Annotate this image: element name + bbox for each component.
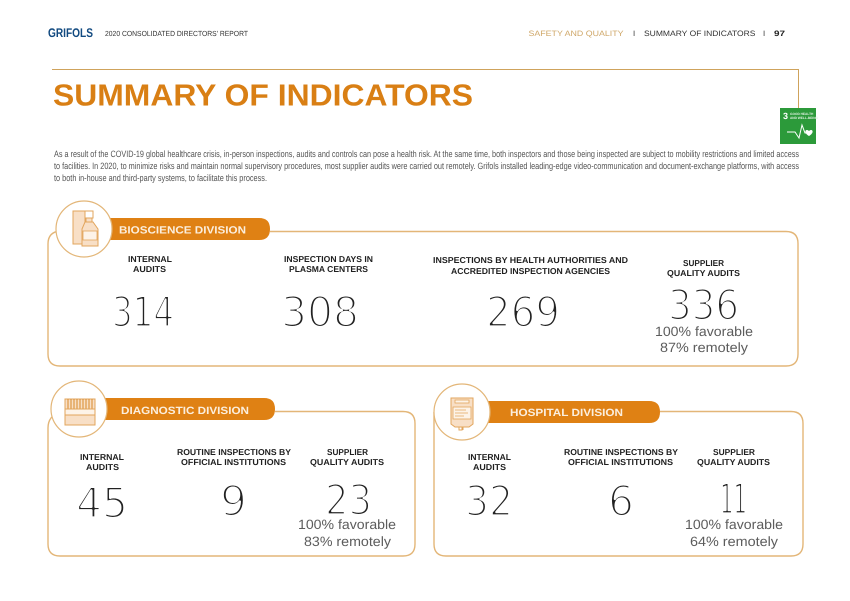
stat: supplier audits: 64% remotely xyxy=(690,534,778,549)
stat: internal audits: INTERNAL xyxy=(128,254,172,264)
header: section breadcrumb and page number: I xyxy=(763,29,765,38)
stat: routine inspections: ROUTINE INSPECTIONS BY xyxy=(177,447,291,457)
stat: inspection days: PLASMA CENTERS xyxy=(289,264,368,274)
stat: internal audits: INTERNAL xyxy=(80,452,124,462)
header: section breadcrumb and page number: SAFETY AND QUALITY xyxy=(528,29,624,38)
stat: supplier audits: 11 xyxy=(720,474,747,524)
icon: vial and box xyxy=(56,201,112,257)
stat: internal audits: AUDITS xyxy=(473,462,506,472)
stat: inspection days: 308 xyxy=(281,288,359,336)
stat: inspection days xyxy=(281,254,373,336)
logo: Grifols: GRIFOLS xyxy=(48,26,93,40)
stat: routine inspections xyxy=(564,447,678,526)
stat: internal audits: 32 xyxy=(465,476,513,526)
stat: supplier audits: SUPPLIER xyxy=(683,258,725,268)
header: section breadcrumb and page number: SUMMARY OF INDICATORS xyxy=(644,29,756,38)
stat: routine inspections: OFFICIAL INSTITUTIONS xyxy=(568,457,673,467)
header: section breadcrumb and page number: 97 xyxy=(774,29,785,38)
panel: bioscience division xyxy=(48,201,798,366)
icon: SDG 3 good health and well-being xyxy=(780,108,818,144)
header: section breadcrumb and page number: I xyxy=(633,29,635,38)
stat: internal audits: 45 xyxy=(76,478,128,528)
intro text: to both in-house and third-party systems, to facilitate this process. xyxy=(54,173,267,183)
header: report name: 2020 CONSOLIDATED DIRECTORS' REPORT xyxy=(105,29,248,38)
stat: routine inspections: 9 xyxy=(220,476,247,526)
stat: internal audits xyxy=(465,452,513,526)
division banner xyxy=(100,218,270,240)
panel outline xyxy=(48,231,798,366)
stat: routine inspections xyxy=(177,447,291,526)
division heading: BIOSCIENCE DIVISION xyxy=(119,224,246,236)
icon: IV bag xyxy=(434,384,490,440)
stat: health authority inspections: ACCREDITED INSPECTION AGENCIES xyxy=(451,266,610,276)
title: SUMMARY OF INDICATORS xyxy=(53,78,473,112)
stat: supplier audits: QUALITY AUDITS xyxy=(667,268,740,278)
stat: health authority inspections: 269 xyxy=(486,288,560,336)
stat: internal audits xyxy=(112,254,174,336)
stat: supplier audits: 100% favorable xyxy=(298,517,396,532)
stat: routine inspections: OFFICIAL INSTITUTIONS xyxy=(181,457,286,467)
stat: supplier audits: QUALITY AUDITS xyxy=(310,457,384,467)
panel: diagnostic division xyxy=(48,381,415,556)
icon: analyzer xyxy=(51,381,107,437)
division heading: DIAGNOSTIC DIVISION xyxy=(121,405,249,417)
panel outline xyxy=(434,412,803,556)
division banner xyxy=(480,401,660,423)
icon: SDG 3 good health and well-being: AND WELL-BEING xyxy=(790,116,818,120)
icon: SDG 3 good health and well-being: GOOD HEALTH xyxy=(790,112,814,116)
stat: supplier audits: 23 xyxy=(325,476,372,524)
stat: supplier audits: 83% remotely xyxy=(304,534,391,549)
stat: supplier audits: 100% favorable xyxy=(655,324,753,339)
stat: internal audits: AUDITS xyxy=(133,264,166,274)
intro text xyxy=(54,149,799,183)
panel outline xyxy=(48,412,415,556)
stat: supplier audits: SUPPLIER xyxy=(713,447,756,457)
stat: routine inspections: ROUTINE INSPECTIONS BY xyxy=(564,447,678,457)
stat: supplier audits: SUPPLIER xyxy=(327,447,369,457)
stat: internal audits: AUDITS xyxy=(86,462,119,472)
division banner xyxy=(95,398,275,420)
stat: internal audits xyxy=(76,452,128,528)
stat: supplier audits xyxy=(655,258,753,355)
stat: supplier audits: QUALITY AUDITS xyxy=(697,457,770,467)
header: section breadcrumb and page number xyxy=(528,29,785,38)
stat: supplier audits: 336 xyxy=(668,280,739,330)
division heading: HOSPITAL DIVISION xyxy=(510,407,623,419)
stat: internal audits: INTERNAL xyxy=(468,452,511,462)
stat: health authority inspections: INSPECTIONS BY HEALTH AUTHORITIES AND xyxy=(433,255,628,265)
stat: supplier audits xyxy=(298,447,396,549)
title rule xyxy=(52,70,798,108)
panel: hospital division xyxy=(434,384,803,556)
stat: supplier audits xyxy=(685,447,783,549)
stat: health authority inspections xyxy=(433,255,628,336)
stat: supplier audits: 87% remotely xyxy=(660,340,748,355)
icon: SDG 3 good health and well-being: 3 xyxy=(783,111,788,121)
stat: inspection days: INSPECTION DAYS IN xyxy=(284,254,373,264)
stat: supplier audits: 100% favorable xyxy=(685,517,783,532)
stat: internal audits: 314 xyxy=(112,288,174,336)
stat: routine inspections: 6 xyxy=(608,476,634,526)
